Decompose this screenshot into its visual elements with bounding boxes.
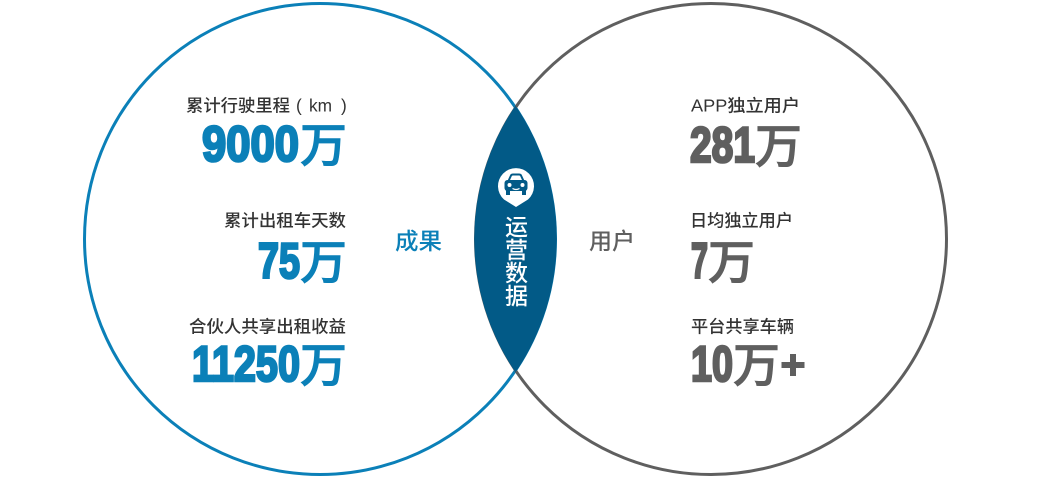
lens title: 据 bbox=[505, 283, 528, 309]
stat: total rental days bbox=[224, 210, 347, 293]
stat: partner income: 合伙人共享出租收益 bbox=[189, 316, 346, 336]
lens title: 营 bbox=[505, 237, 528, 263]
stat: app users: APP独立用户 bbox=[691, 96, 800, 116]
stat: total mileage: km bbox=[309, 96, 332, 116]
stat: partner income: 万 bbox=[300, 327, 347, 396]
stat: app users: 281 bbox=[690, 117, 755, 173]
stat: daily users bbox=[690, 210, 793, 293]
central lens overlap bbox=[474, 106, 557, 372]
stat: daily users: 7 bbox=[691, 233, 708, 289]
stat: app users bbox=[690, 96, 802, 177]
stat: daily users: 万 bbox=[708, 224, 755, 293]
stat: shared vehicles: 10 bbox=[691, 336, 733, 392]
icon: car location pin bbox=[498, 168, 534, 207]
stat: total mileage: 9000 bbox=[202, 116, 299, 172]
right circle bbox=[476, 4, 946, 474]
stat: total mileage: 万 bbox=[300, 107, 347, 176]
stat: total mileage: ) bbox=[341, 96, 347, 116]
stat: daily users: 日均独立用户 bbox=[690, 210, 793, 230]
lens title: 运 bbox=[505, 214, 528, 240]
lens title: 数 bbox=[505, 260, 528, 286]
stat: total mileage: ( bbox=[296, 96, 302, 116]
stat: total mileage: 累计行驶里程 bbox=[186, 96, 290, 116]
heading: results: 成果 bbox=[395, 228, 442, 254]
stat: app users: 万 bbox=[755, 108, 802, 177]
heading: users: 用户 bbox=[589, 228, 635, 254]
stat: shared vehicles: 万 bbox=[733, 327, 780, 396]
stat: partner income bbox=[189, 316, 347, 396]
stat: partner income: 11250 bbox=[192, 336, 300, 392]
stat: shared vehicles bbox=[691, 316, 804, 396]
stat: shared vehicles: 平台共享车辆 bbox=[691, 316, 794, 336]
stat: total mileage bbox=[186, 96, 347, 176]
stat: total rental days: 75 bbox=[258, 233, 300, 289]
stat: total rental days: 累计出租车天数 bbox=[224, 210, 346, 230]
stat: total rental days: 万 bbox=[300, 224, 347, 293]
lens title bbox=[505, 214, 528, 309]
left circle bbox=[84, 4, 556, 474]
